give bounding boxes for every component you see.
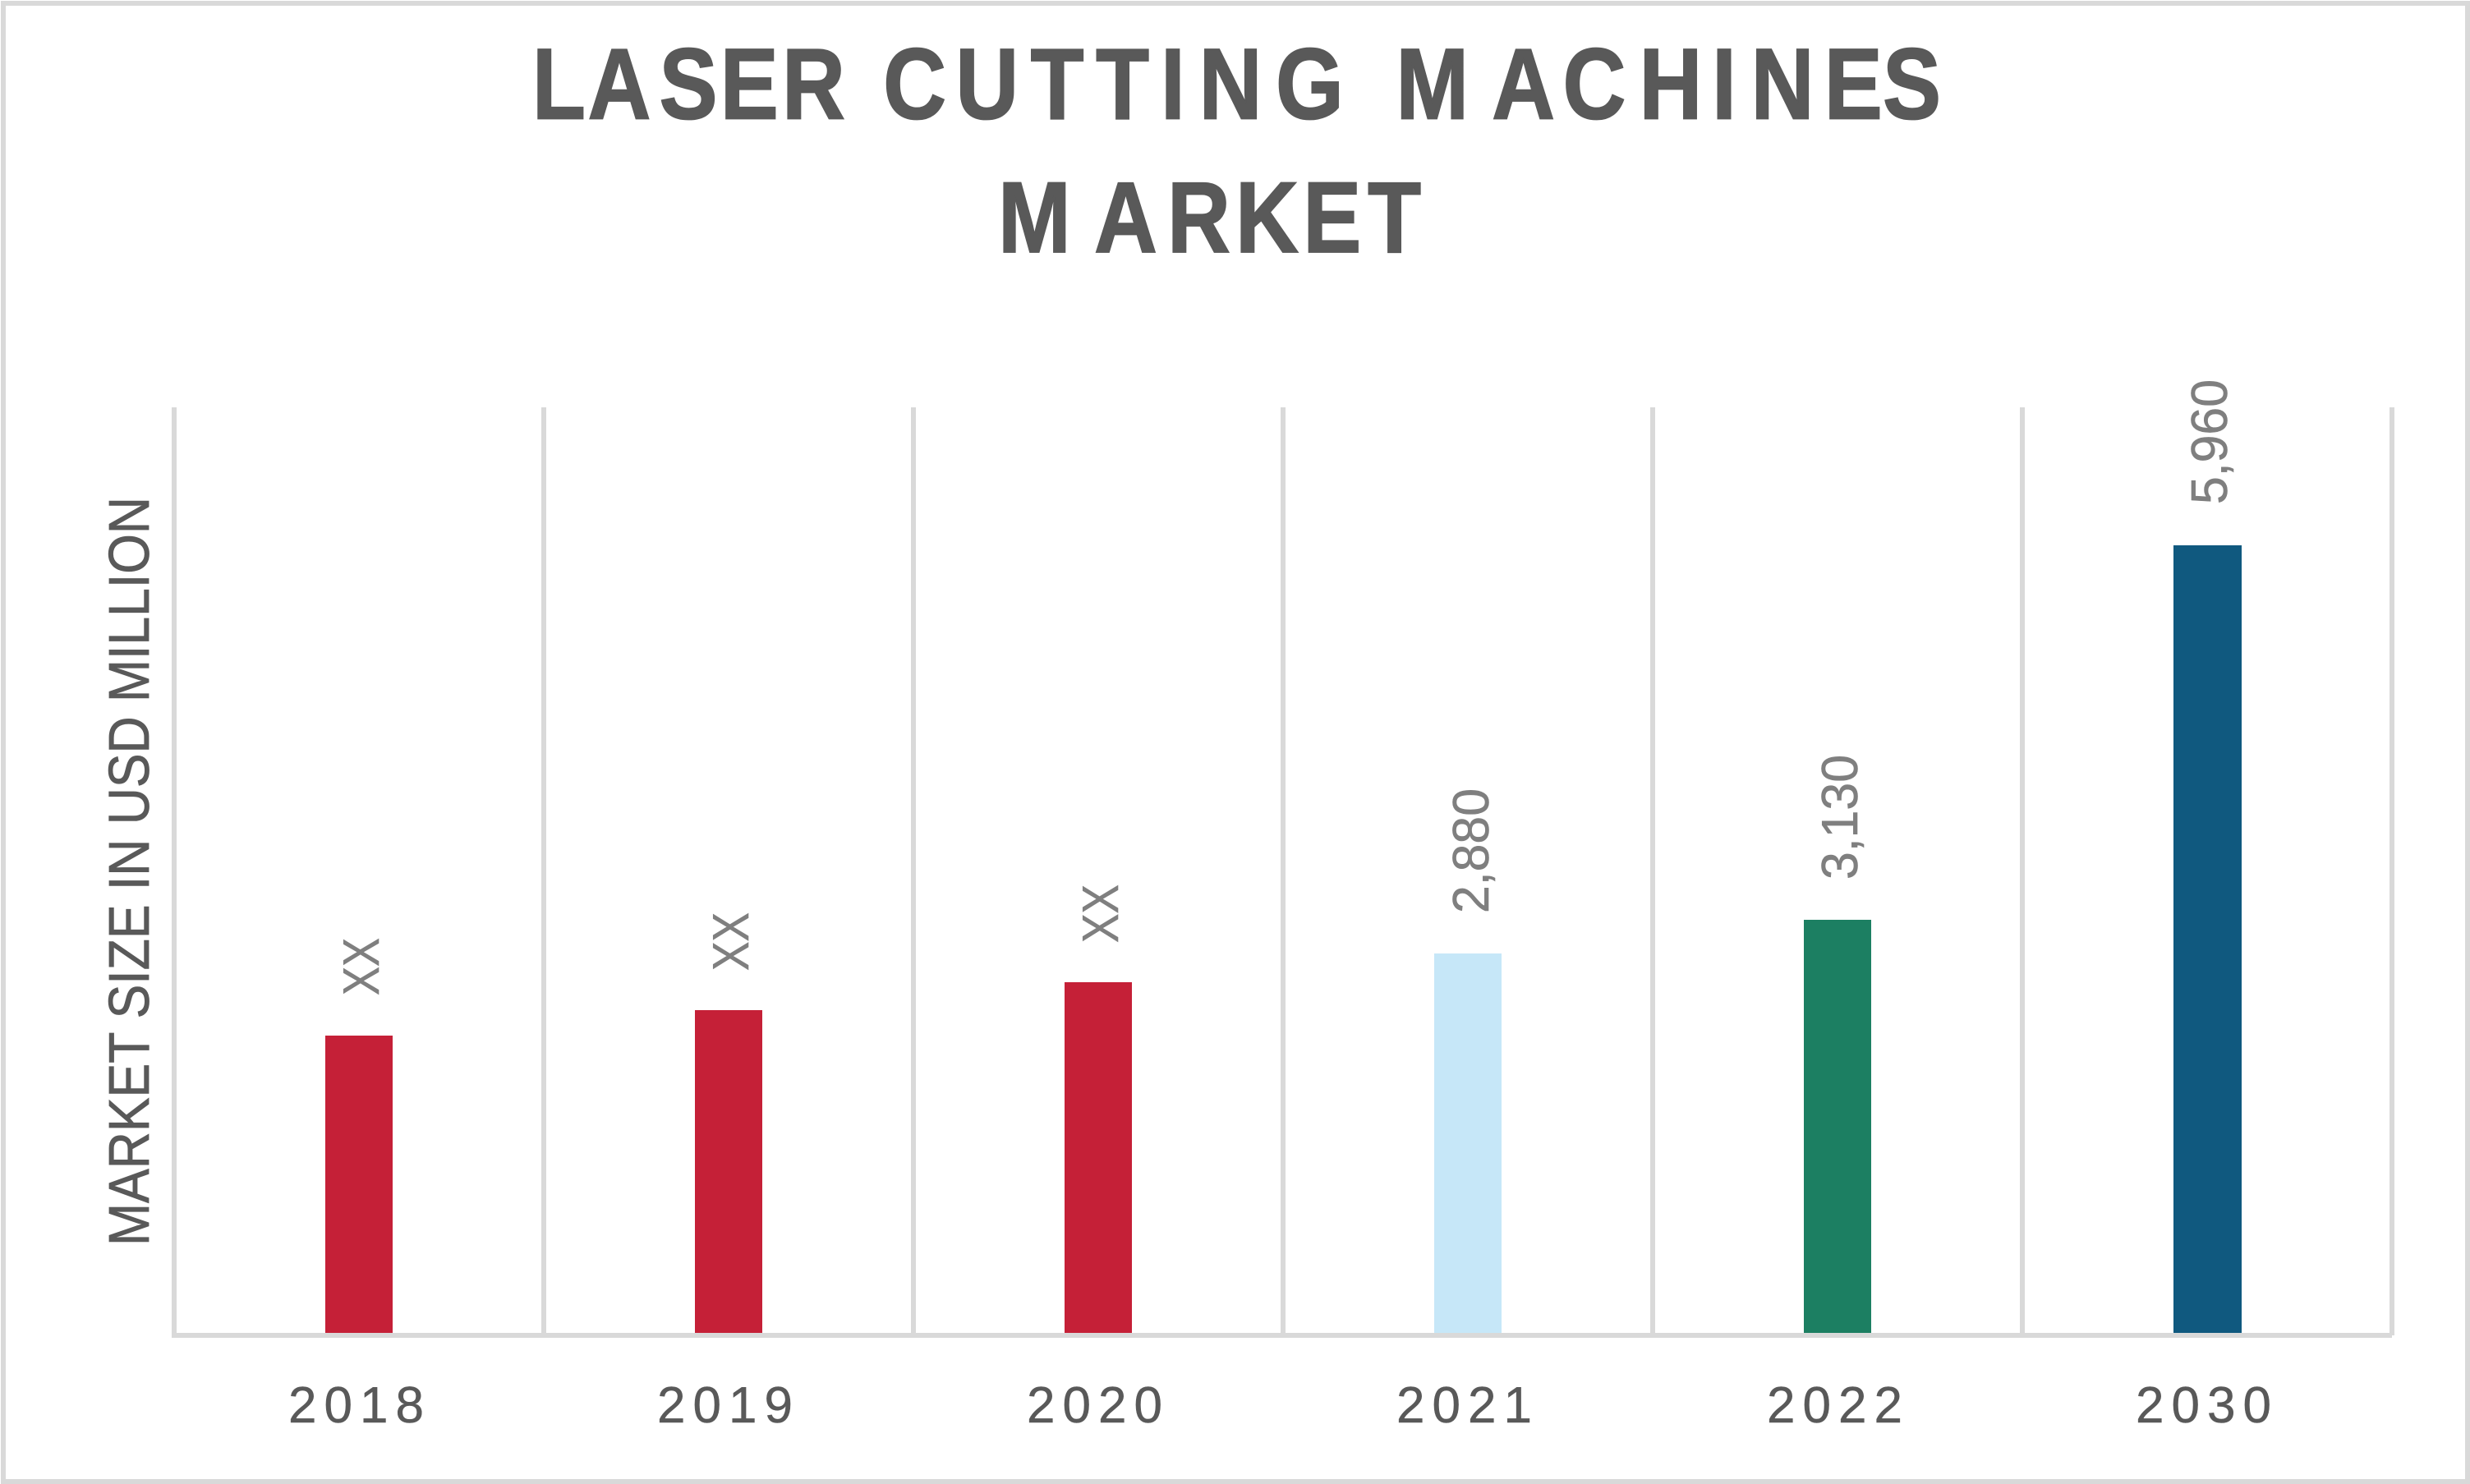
value: 2022: 3,130 <box>1812 755 1869 880</box>
bars <box>325 545 2242 1333</box>
value: 2030: 5,960 <box>2182 379 2238 504</box>
title <box>532 28 1941 274</box>
y-axis title: MARKET SIZE IN USD MILLION <box>97 497 161 1246</box>
bar: 2019 <box>695 1010 762 1333</box>
year: 2020: 2020 <box>1027 1377 1162 1434</box>
title: LASER CUTTING MACHINES <box>532 28 1941 140</box>
title: MARKET <box>998 162 1421 274</box>
bar: 2020 <box>1065 982 1132 1333</box>
x-axis year labels <box>288 1377 2271 1434</box>
value: 2018: XX <box>333 938 390 995</box>
bar: 2022 <box>1804 920 1871 1333</box>
data labels <box>333 379 2238 995</box>
year: 2030: 2030 <box>2136 1377 2271 1434</box>
value: 2021: 2,880 <box>1443 788 1500 913</box>
year: 2019: 2019 <box>657 1377 793 1434</box>
year: 2022: 2022 <box>1767 1377 1902 1434</box>
year: 2021: 2021 <box>1396 1377 1532 1434</box>
bar: 2030 <box>2173 545 2242 1333</box>
year: 2018: 2018 <box>288 1377 424 1434</box>
bar: 2018 <box>325 1036 393 1333</box>
value: 2020: XX <box>1073 884 1129 943</box>
value: 2019: XX <box>703 912 760 971</box>
bar: 2021 <box>1434 953 1502 1333</box>
